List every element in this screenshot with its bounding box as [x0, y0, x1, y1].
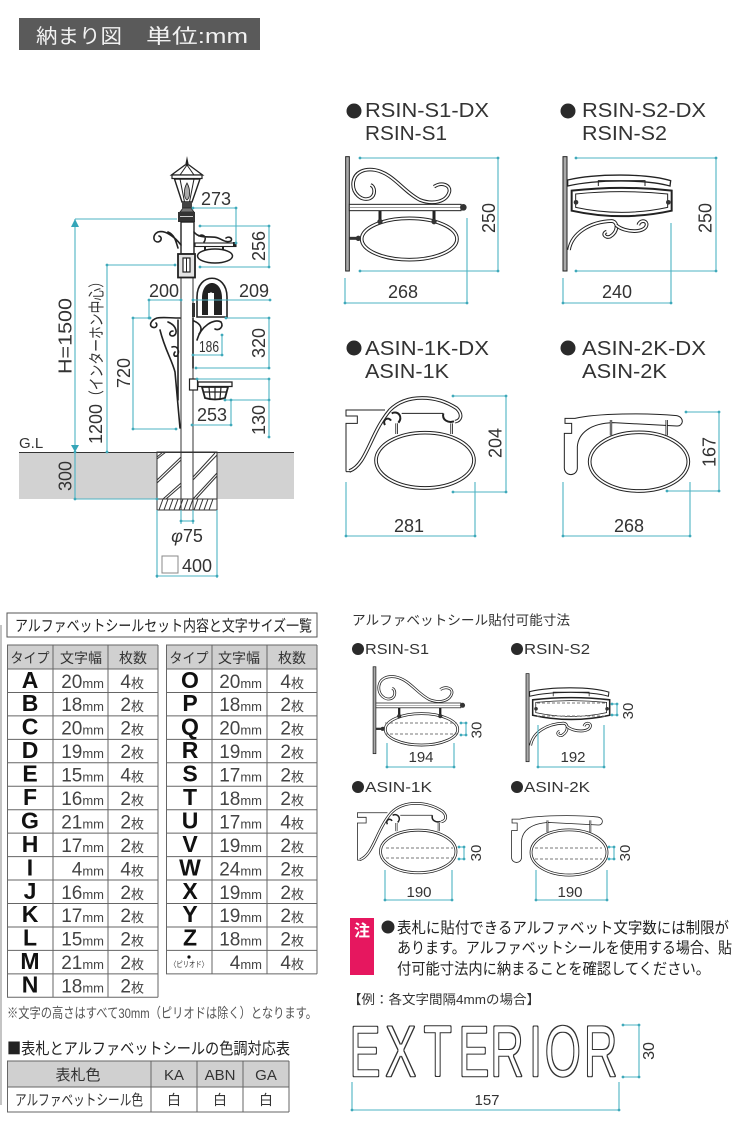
row L: 2枚 — [120, 930, 144, 951]
table grid: 白 — [213, 1092, 227, 1108]
row F: 2枚 — [120, 789, 144, 810]
row R — [182, 737, 304, 763]
model label: RSIN-S2-DX — [582, 100, 706, 122]
dimensions — [536, 845, 634, 901]
dimension: 1200 intercom centre: 1200 — [86, 404, 106, 444]
table title: アルファベットシールセット内容と文字サイズ一覧 — [15, 617, 312, 635]
table grid — [7, 1061, 289, 1112]
dimension: 209: 209 — [239, 281, 269, 301]
row X — [182, 878, 304, 904]
row X: X — [182, 878, 198, 904]
example: EXTERIOR outlined lettering: EXTERIOR — [350, 1012, 617, 1091]
dimension: 256: 256 — [249, 231, 269, 261]
drawing — [357, 803, 456, 873]
row H: H — [22, 831, 38, 857]
row I: 4枚 — [120, 859, 144, 880]
label: ASIN-2K — [524, 779, 590, 796]
dimensions: 240 — [602, 282, 632, 302]
row B: 2枚 — [120, 695, 144, 716]
row P — [182, 690, 304, 716]
dimension: 273 — [193, 189, 236, 243]
panel: colour correspondence table — [7, 1035, 290, 1112]
sign bar and oval — [195, 242, 236, 263]
row period: 4枚 — [280, 953, 304, 974]
panel: RSIN-S1 overall dimensions — [345, 100, 499, 303]
row H: 2枚 — [120, 836, 144, 857]
row N: 18mm — [61, 977, 104, 998]
row X: 2枚 — [280, 883, 304, 904]
row N — [22, 972, 144, 998]
note text: 付可能寸法内に納まることを確認してください。 — [397, 960, 710, 978]
dimension: 300 — [56, 452, 157, 499]
dimension: 720 — [114, 318, 176, 429]
row G: 21mm — [61, 812, 104, 833]
dimensions: 30 — [617, 845, 634, 861]
dimensions: 30 — [641, 1042, 658, 1060]
model label — [346, 338, 489, 383]
table grid: GA — [255, 1067, 277, 1084]
applicable zone — [385, 723, 457, 734]
row period — [170, 953, 304, 974]
row K: 17mm — [61, 906, 104, 927]
row N: N — [22, 972, 38, 998]
bullet — [382, 920, 394, 934]
row J: 2枚 — [120, 883, 144, 904]
row H: 17mm — [61, 836, 104, 857]
panel: RSIN-S2 overall dimensions — [560, 100, 716, 303]
row J: 16mm — [61, 883, 104, 904]
row Z: Z — [183, 925, 197, 951]
row W: 2枚 — [280, 859, 304, 880]
row W — [179, 854, 304, 880]
left header row: 枚数 — [119, 650, 147, 666]
row D: 19mm — [61, 742, 104, 763]
row V: V — [182, 831, 198, 857]
row F: 16mm — [61, 789, 104, 810]
planter basket — [190, 379, 232, 400]
panel: small ASIN-1K — [352, 779, 485, 901]
dimension: 200: 200 — [149, 281, 179, 301]
row I — [27, 854, 144, 880]
row P: P — [182, 690, 198, 716]
row Z: 2枚 — [280, 930, 304, 951]
dimensions: 190 — [406, 884, 432, 901]
row K — [22, 901, 144, 927]
row D — [22, 737, 144, 763]
row T — [183, 784, 304, 810]
dimension: 253 — [192, 400, 231, 425]
dimension: square 400 — [157, 510, 217, 578]
dimensions — [352, 1025, 658, 1110]
row C: C — [22, 714, 38, 740]
dimension: 320: 320 — [249, 328, 269, 358]
panel: ASIN-1K overall dimensions — [346, 338, 506, 536]
panel: alphabet seal set table — [7, 613, 317, 1021]
row E: E — [22, 760, 38, 786]
dimensions — [538, 703, 637, 767]
dimensions — [563, 412, 720, 536]
dimensions: 30 — [468, 845, 485, 861]
sign bracket drawing — [346, 398, 474, 488]
row G — [21, 807, 144, 833]
row E: 15mm — [61, 766, 104, 786]
dimension: 720: 720 — [114, 358, 134, 388]
dimensions — [387, 722, 486, 767]
dimension: 253: 253 — [197, 405, 227, 425]
dimension: 186 — [193, 335, 222, 356]
heading bar: installation diagram — [19, 18, 260, 50]
dimension: H=1500: H=1500 — [56, 298, 76, 374]
drawing — [373, 667, 465, 754]
callout: caution note — [350, 918, 732, 978]
row W: W — [179, 854, 201, 880]
row S: S — [182, 760, 198, 786]
table title — [7, 613, 317, 637]
row I: I — [27, 854, 33, 880]
row V: 2枚 — [280, 836, 304, 857]
row B: 18mm — [61, 695, 104, 716]
row A: 4枚 — [120, 672, 144, 693]
row O: 20mm — [219, 672, 262, 693]
row R: 19mm — [219, 742, 262, 763]
row E: 4枚 — [120, 766, 144, 786]
row Q: Q — [181, 714, 199, 740]
right header row: タイプ — [170, 650, 208, 666]
heading bar: installation diagram: 納まり図 — [36, 25, 122, 48]
model label — [346, 100, 489, 145]
row V — [182, 831, 304, 857]
dimensions: 268 — [388, 282, 418, 302]
sign bracket drawing — [564, 414, 688, 491]
drawing — [526, 674, 610, 762]
row T: 2枚 — [280, 789, 304, 810]
row V: 19mm — [219, 836, 262, 857]
left table — [7, 645, 158, 998]
diagram: post elevation — [19, 156, 294, 578]
dimensions: 192 — [560, 749, 586, 766]
dimension: 130 — [197, 379, 269, 437]
row U: 4枚 — [280, 812, 304, 833]
right header row: 枚数 — [278, 650, 306, 666]
row W: 24mm — [219, 859, 262, 880]
model label — [560, 100, 706, 145]
model label: RSIN-S1 — [365, 123, 447, 145]
sign bracket drawing — [563, 157, 672, 271]
row B: B — [22, 690, 38, 716]
row U — [182, 807, 304, 833]
row D: 2枚 — [120, 742, 144, 763]
dimensions — [346, 396, 506, 536]
model label: ASIN-2K — [582, 361, 668, 383]
drawing — [512, 816, 607, 875]
row G: 2枚 — [120, 812, 144, 833]
note badge: 注 — [354, 922, 370, 940]
heading bar: installation diagram: 単位:mm — [146, 25, 248, 48]
note badge — [350, 918, 374, 975]
dimensions: 268 — [614, 516, 644, 536]
dimensions: 190 — [557, 884, 583, 901]
dimensions: 281 — [394, 516, 424, 536]
row A — [22, 667, 144, 693]
post shaft — [181, 278, 193, 510]
row S: 17mm — [219, 766, 262, 786]
row B — [22, 690, 144, 716]
post-top box — [181, 222, 194, 254]
row E — [22, 760, 144, 786]
panel: small RSIN-S1 — [352, 641, 486, 767]
note text — [397, 919, 732, 978]
row J — [24, 878, 144, 904]
panel: small RSIN-S2 — [511, 641, 637, 767]
row K: 2枚 — [120, 906, 144, 927]
row U: 17mm — [219, 812, 262, 833]
dimensions: 250 — [696, 203, 716, 233]
row C — [22, 714, 144, 740]
table grid: アルファベットシール色 — [15, 1092, 143, 1109]
dimensions: 30 — [620, 703, 637, 719]
dimensions: 250 — [479, 203, 499, 233]
example caption: 【例：各文字間隔4mmの場合】 — [348, 992, 540, 1007]
lamp, intercom and fittings — [151, 156, 236, 428]
row C: 2枚 — [120, 719, 144, 740]
right table — [166, 645, 317, 974]
row P: 18mm — [219, 695, 262, 716]
row H — [22, 831, 144, 857]
label: RSIN-S2 — [524, 641, 590, 658]
applicable zone — [386, 848, 453, 858]
dimension: 320 — [196, 318, 269, 368]
row M: 2枚 — [120, 953, 144, 974]
row Y: 19mm — [219, 906, 262, 927]
row M — [20, 948, 144, 974]
row period: 4mm — [230, 953, 262, 974]
table heading: ■表札とアルファベットシールの色調対応表 — [7, 1035, 290, 1059]
row period: 〈ピリオド〉 — [170, 960, 208, 969]
row Q: 2枚 — [280, 719, 304, 740]
sign bracket drawing — [346, 157, 467, 271]
dimensions: 194 — [408, 749, 434, 766]
dimension: post diameter 75 — [171, 510, 203, 546]
dimension: H=1500 — [56, 219, 177, 452]
row Y: Y — [182, 901, 198, 927]
left header row — [10, 650, 147, 666]
row U: U — [182, 807, 198, 833]
upper scrolls — [154, 232, 232, 248]
row L — [23, 925, 144, 951]
table grid: KA — [164, 1067, 184, 1084]
applicable zone — [535, 848, 602, 859]
row Z — [183, 925, 304, 951]
left header row: タイプ — [10, 650, 50, 666]
row N: 2枚 — [120, 977, 144, 998]
row M: 21mm — [61, 953, 104, 974]
row F — [23, 784, 144, 810]
row R: R — [182, 737, 199, 763]
model label: ASIN-2K-DX — [582, 338, 706, 360]
panel: ASIN-2K overall dimensions — [560, 338, 720, 536]
mailbox right bracket — [193, 318, 222, 368]
row A: A — [22, 667, 38, 693]
dimensions: 167 — [700, 437, 720, 467]
dimension: post diameter 75: φ75 — [171, 526, 203, 546]
row Q: 20mm — [219, 719, 262, 740]
dimension: 186: 186 — [199, 339, 219, 356]
row K: K — [22, 901, 39, 927]
row Y — [182, 901, 304, 927]
dimensions — [563, 158, 716, 303]
row L: L — [23, 925, 37, 951]
row I: 4mm — [72, 859, 104, 880]
row A: 20mm — [61, 672, 104, 693]
dimension: 200 — [149, 281, 181, 318]
panel: small ASIN-2K — [511, 779, 634, 901]
dimensions: 204 — [486, 428, 506, 458]
row T: T — [183, 784, 197, 810]
row X: 19mm — [219, 883, 262, 904]
ground section — [19, 452, 294, 510]
right header row: 文字幅 — [218, 650, 260, 666]
row C: 20mm — [61, 719, 104, 740]
row F: F — [23, 784, 37, 810]
row O: 4枚 — [280, 672, 304, 693]
lamp head — [172, 156, 202, 222]
row R: 2枚 — [280, 742, 304, 763]
row O — [181, 667, 304, 693]
dimensions — [345, 158, 499, 303]
label: RSIN-S1 — [365, 641, 429, 658]
table grid: 白 — [259, 1092, 273, 1108]
dimensions: 157 — [474, 1092, 500, 1109]
G.L label: G.L — [19, 435, 43, 452]
row L: 15mm — [61, 930, 104, 951]
table grid: 白 — [167, 1092, 181, 1108]
dimension: 273: 273 — [201, 189, 231, 209]
model label — [560, 338, 706, 383]
dimension: 209 — [193, 281, 270, 301]
row Q — [181, 714, 304, 740]
dimensions: 30 — [469, 722, 486, 738]
table grid: ABN — [205, 1067, 235, 1084]
row Y: 2枚 — [280, 906, 304, 927]
row Z: 18mm — [219, 930, 262, 951]
model label: ASIN-1K-DX — [365, 338, 489, 360]
left strip at page edge — [0, 625, 2, 1105]
dimension: 300: 300 — [56, 461, 76, 491]
dimension: 256 — [200, 226, 269, 267]
table footnote: ※文字の高さはすべて30mm（ピリオドは除く）となります。 — [7, 1005, 317, 1021]
model label: RSIN-S2 — [582, 123, 667, 145]
row D: D — [22, 737, 38, 763]
row J: J — [24, 878, 36, 904]
heading: applicable seal dimensions: アルファベットシール貼付可能寸法 — [352, 613, 570, 628]
row T: 18mm — [219, 789, 262, 810]
dimension: square 400: 400 — [182, 556, 212, 576]
dimensions — [385, 845, 485, 901]
dimension: 130: 130 — [249, 405, 269, 435]
mailbox left bracket — [151, 318, 180, 428]
intercom box — [178, 254, 195, 278]
left header row: 文字幅 — [60, 650, 102, 666]
label: ASIN-1K — [365, 779, 432, 796]
row P: 2枚 — [280, 695, 304, 716]
row S — [182, 760, 304, 786]
right header row — [170, 650, 306, 666]
applicable zone — [537, 703, 605, 716]
row G: G — [21, 807, 39, 833]
row S: 2枚 — [280, 766, 304, 786]
table grid: 表札色 — [55, 1067, 101, 1084]
row M: M — [20, 948, 40, 974]
dimension: 1200 intercom centre — [86, 265, 175, 452]
row O: O — [181, 667, 199, 693]
model label: ASIN-1K — [365, 361, 450, 383]
letterbox — [192, 278, 227, 317]
dimension: 1200 intercom centre: （インターホン中心） — [88, 275, 106, 403]
model label: RSIN-S1-DX — [365, 100, 489, 122]
